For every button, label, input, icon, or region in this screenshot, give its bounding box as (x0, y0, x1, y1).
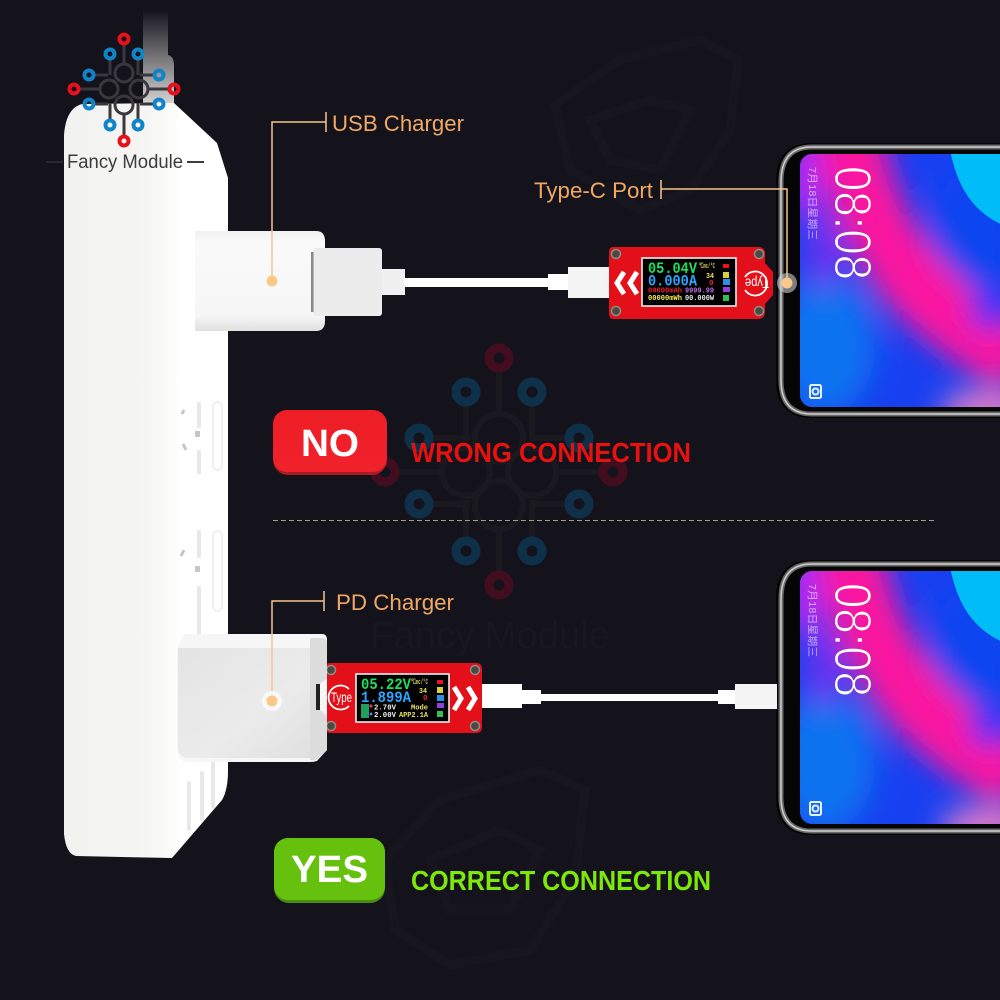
screen (642, 258, 736, 306)
badge: YES (274, 838, 385, 903)
power strip (64, 10, 228, 858)
badge: NO (273, 410, 387, 475)
heading: wrong connection: WRONG CONNECTION (411, 437, 691, 468)
lower phone (775, 547, 1000, 845)
phone frame (776, 143, 1000, 418)
USB plug (313, 248, 382, 316)
socket slots (189, 763, 213, 829)
upper phone (775, 130, 1000, 428)
watermark logo: Fancy Module (370, 615, 610, 657)
callout: Type-C Port (534, 178, 797, 293)
PD charger (177, 634, 327, 762)
readings: 00000mAh (648, 288, 682, 296)
readings: APP2.1A (399, 712, 428, 720)
socket lower (181, 530, 222, 634)
camera icon (810, 802, 821, 815)
lower USB meter (318, 663, 482, 733)
callout: PD Charger: PD Charger (336, 590, 454, 615)
phone frame (776, 560, 1000, 835)
charger side (310, 638, 327, 760)
current: 0.000A (648, 272, 698, 290)
readings (648, 261, 715, 303)
readings: 00000mWh (648, 295, 682, 303)
callout: Type-C Port: Type-C Port (534, 178, 653, 203)
logo (46, 34, 204, 173)
screen (356, 674, 449, 722)
meter body (318, 663, 482, 733)
voltage: 05.04V (648, 260, 698, 278)
readings: 34 (706, 273, 714, 281)
upper cable (404, 267, 610, 298)
readings (374, 677, 428, 720)
date: 7月18日星期三 (806, 167, 818, 240)
meter body (609, 247, 773, 319)
clock: 08:08 (823, 583, 881, 697)
readings: 2.00V (374, 712, 396, 720)
charger body (195, 231, 325, 331)
callout: PD Charger (262, 590, 454, 711)
voltage: 05.22V (361, 676, 412, 694)
readings: ℃mc/°C (699, 261, 715, 271)
readings: 9999.99 (685, 288, 714, 296)
readings: 34 (419, 688, 427, 696)
date: 7月18日星期三 (806, 584, 818, 657)
socket upper (182, 402, 222, 474)
strip cord (143, 10, 174, 106)
heading: correct connection: CORRECT CONNECTION (411, 865, 711, 896)
divider (273, 520, 935, 522)
readings: ℃mc/°C (411, 677, 428, 687)
badge: NO: NO (301, 423, 359, 465)
Type logo: Type (745, 276, 769, 292)
readings: 00.000W (685, 295, 714, 303)
Type logo: Type (331, 689, 352, 705)
wallpaper (775, 130, 1000, 428)
screws (612, 250, 764, 316)
camera icon (810, 385, 821, 398)
Type logo (745, 272, 769, 296)
wallpaper (775, 547, 1000, 845)
charger top lip (177, 634, 327, 762)
current: 1.899A (361, 689, 412, 707)
callout: USB Charger (266, 111, 464, 286)
upper USB meter (609, 247, 773, 319)
faint background sketches (385, 40, 738, 965)
screws (326, 666, 480, 730)
USB charger (195, 231, 405, 331)
readings: Mode (411, 704, 428, 712)
chevrons (454, 687, 475, 710)
bar graph icon (361, 704, 372, 718)
readings: 0 (709, 280, 714, 288)
watermark logo (370, 348, 623, 657)
charger face (178, 648, 310, 758)
callout: USB Charger: USB Charger (332, 111, 464, 136)
chevrons (617, 272, 637, 294)
clock: 08:08 (823, 166, 881, 280)
badge: YES: YES (291, 849, 368, 891)
lower cable (482, 684, 777, 709)
status icons (437, 680, 444, 717)
brand name: Fancy Module (67, 152, 183, 173)
strip body (64, 103, 228, 858)
status icons (723, 264, 730, 301)
readings: 2.70V (374, 704, 396, 712)
plug stub (382, 269, 405, 295)
readings: 0 (423, 695, 428, 703)
Type logo (329, 686, 352, 710)
